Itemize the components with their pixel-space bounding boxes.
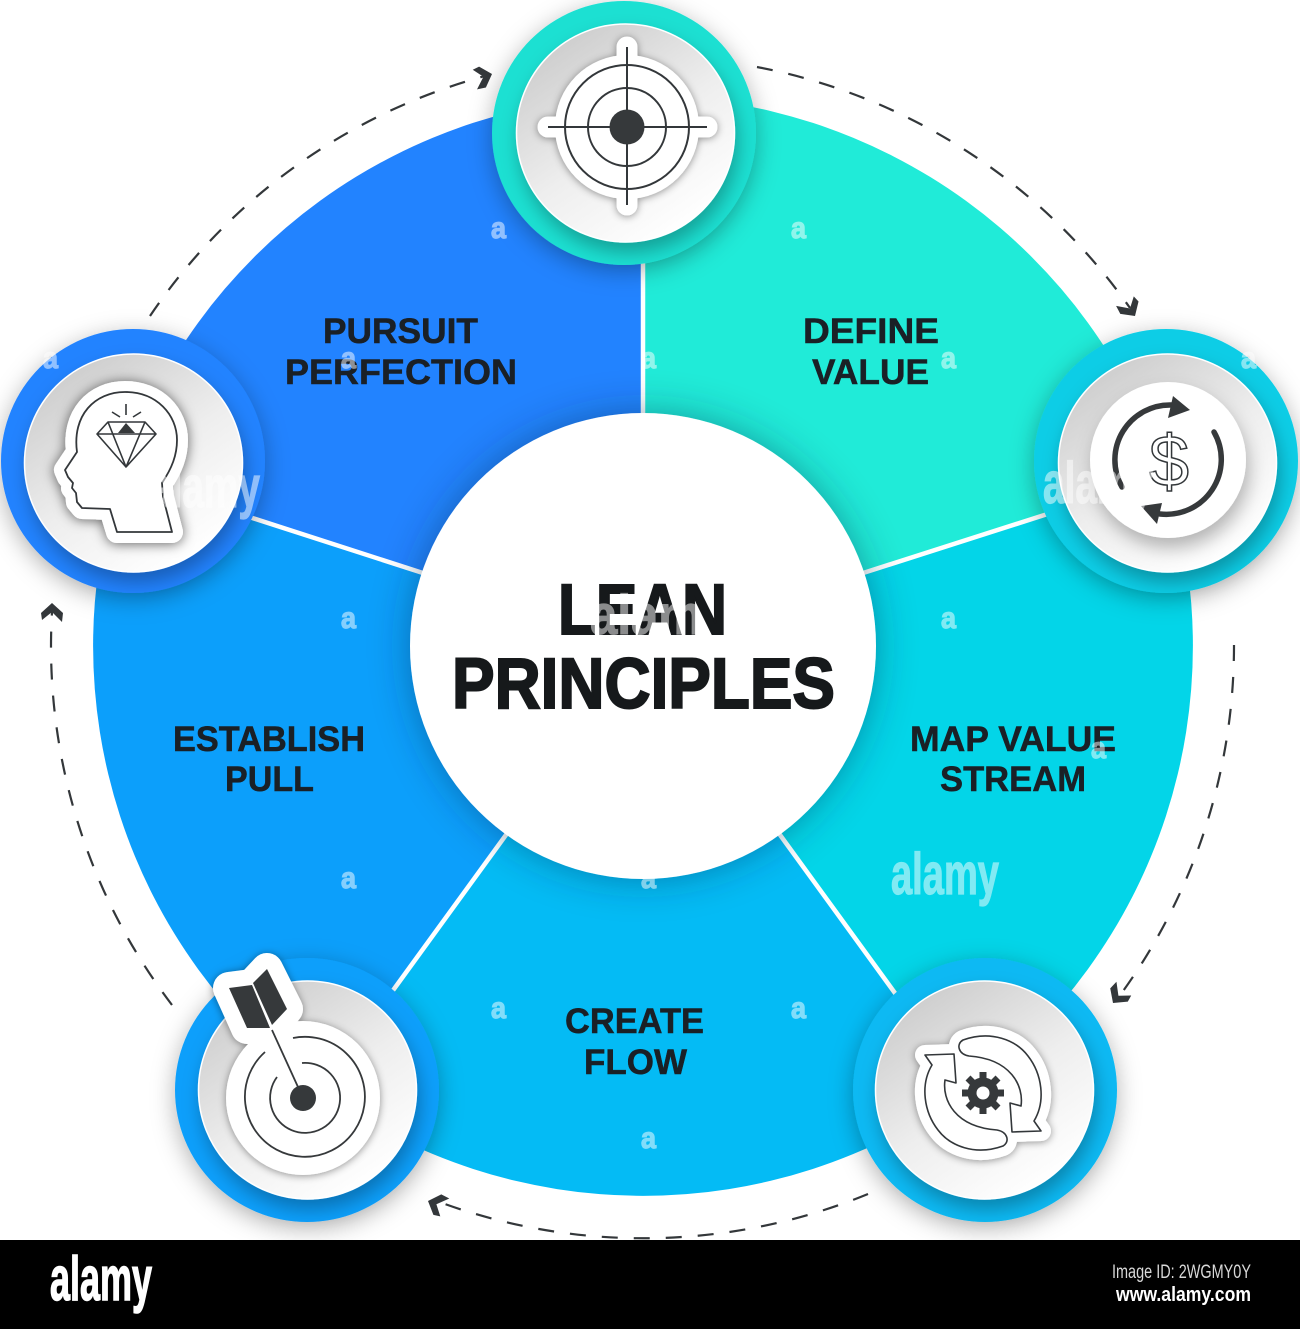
label: pursuit perfection: PURSUIT [323,312,478,351]
watermark: alamy overlays: a [641,1122,656,1155]
watermark: alamy overlays: a [941,342,956,375]
arrow: define value to map value stream [757,67,1144,322]
node: establish pull dart [175,958,439,1222]
label: establish pull: ESTABLISH [173,720,365,759]
watermark: alamy overlays: a [43,342,58,375]
label: create flow [565,1002,704,1082]
label: create flow: CREATE [565,1002,704,1041]
label: define value [803,312,939,392]
arrow: create flow to establish pull [424,1191,868,1238]
segment: map value stream [643,476,1193,1091]
label: map value stream: MAP VALUE [910,720,1116,759]
label: define value: DEFINE [803,312,939,351]
watermark: alamy overlays: alamy [1043,451,1153,516]
watermark: alamy overlays: alamy [150,455,260,520]
title: lean principles: PRINCIPLES [452,645,835,724]
node: define value target [492,1,756,265]
node: map value stream dollar [1034,329,1298,593]
watermark: alamy overlays: a [641,342,656,375]
footer bar [0,1240,1300,1329]
watermark: alamy overlays: a [1091,732,1106,765]
watermark: alamy overlays: a [491,992,506,1025]
watermark: alamy overlays: alamy [891,842,999,907]
watermark: alamy overlays [43,212,1256,1155]
segment: create flow [320,646,966,1196]
footer image id: Image ID: 2WGMY0Y [1112,1262,1251,1283]
title: lean principles [452,571,835,724]
title: lean principles: LEAN [558,571,727,650]
icon: dollar cycle [1090,382,1246,538]
label: establish pull [173,720,365,799]
arrow: establish pull to pursuit perfection [41,603,172,1005]
label: map value stream [910,720,1116,799]
watermark: alamy overlays: a [791,212,806,245]
icon: head with diamond [65,392,177,532]
watermark: alamy overlays: a [341,342,356,375]
label: pursuit perfection [285,312,517,392]
watermark: alamy overlays: a [341,602,356,635]
icon: crosshair target [548,47,707,205]
watermark: alamy overlays: a [341,862,356,895]
label: establish pull: PULL [225,760,314,799]
segment: pursuit perfection [120,96,643,646]
footer logo: alamy [50,1245,152,1314]
watermark: alamy overlays: a [641,862,656,895]
arrow: pursuit perfection to define value [150,64,495,316]
watermark: alamy overlays: a [941,602,956,635]
icon: dollar cycle: $ [1149,422,1189,502]
label: define value: VALUE [812,353,929,392]
watermark: alamy overlays: a [791,992,806,1025]
watermark: alamy overlays: a [1241,342,1256,375]
icon: gear cycle [925,1036,1041,1150]
node: pursuit perfection head diamond [1,329,265,593]
segment: define value [643,96,1166,646]
footer url: www.alamy.com [1115,1284,1251,1306]
arrow: map value stream to create flow [1104,645,1234,1010]
watermark: alamy overlays: alam [590,583,702,646]
label: map value stream: STREAM [940,760,1086,799]
node: create flow gear [853,958,1117,1222]
label: create flow: FLOW [584,1043,687,1082]
watermark: alamy overlays: a [491,212,506,245]
panel: five-segment wheel [93,96,1193,1196]
label: pursuit perfection: PERFECTION [285,353,517,392]
segment: establish pull [93,476,643,1091]
center circle [410,413,876,879]
icon: dart and bullseye [226,969,380,1175]
